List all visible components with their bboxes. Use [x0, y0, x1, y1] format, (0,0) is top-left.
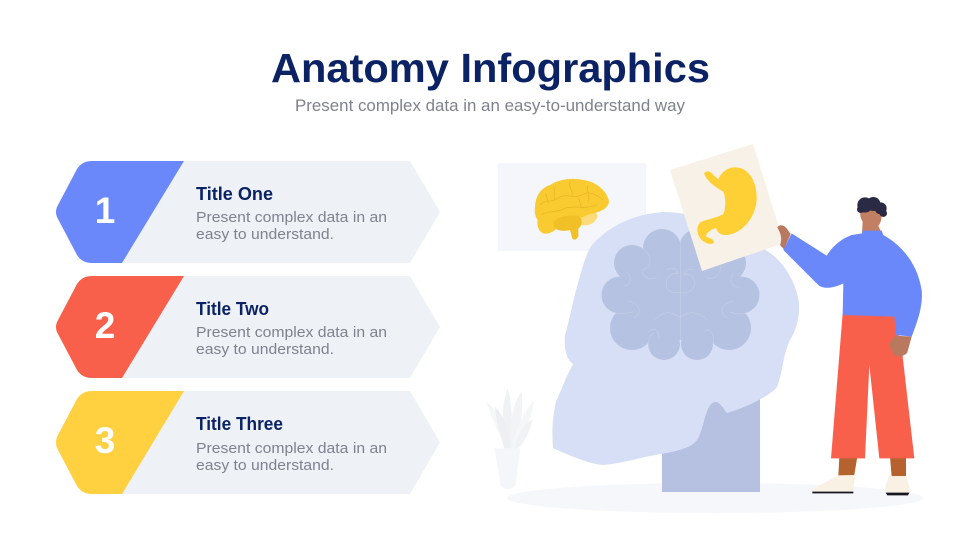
icon: plant in vase [487, 388, 534, 489]
hair [857, 197, 887, 217]
ground shadow [507, 483, 923, 513]
panel: item two: Present complex data in an [196, 325, 387, 341]
panel: item one: Present complex data in an [196, 210, 387, 226]
panel: item three: 3 [95, 420, 115, 461]
sweater [783, 231, 922, 337]
panel: item three: Present complex data in an [196, 441, 387, 457]
title: Anatomy Infographics [271, 45, 710, 91]
panel: item two [56, 276, 440, 378]
head silhouette [552, 212, 799, 465]
neck and face [860, 207, 882, 233]
panel: item three: Title Three [196, 414, 283, 434]
neck block [662, 395, 760, 492]
panel: item one: Title One [196, 184, 273, 204]
trousers [831, 313, 914, 458]
person [777, 197, 922, 495]
panel: item two: easy to understand. [196, 342, 334, 358]
shoes [812, 475, 911, 493]
ankles [838, 457, 906, 477]
resting hand [889, 336, 912, 356]
panel: item two: 2 [95, 305, 115, 346]
brain illustration [602, 229, 760, 360]
icon: yellow brain [535, 179, 609, 240]
panel: item one [56, 161, 440, 263]
icon: stomach [697, 167, 757, 244]
panel: item one: 1 [95, 190, 115, 231]
panel: item three [56, 391, 440, 494]
poster: stomach held by person [670, 144, 784, 271]
panel: item one: easy to understand. [196, 227, 334, 243]
poster: brain [498, 163, 646, 251]
raised hand [777, 225, 791, 249]
panel: item three: easy to understand. [196, 458, 334, 474]
subtitle: Present complex data in an easy-to-understand way [295, 97, 686, 115]
panel: item two: Title Two [196, 299, 269, 319]
